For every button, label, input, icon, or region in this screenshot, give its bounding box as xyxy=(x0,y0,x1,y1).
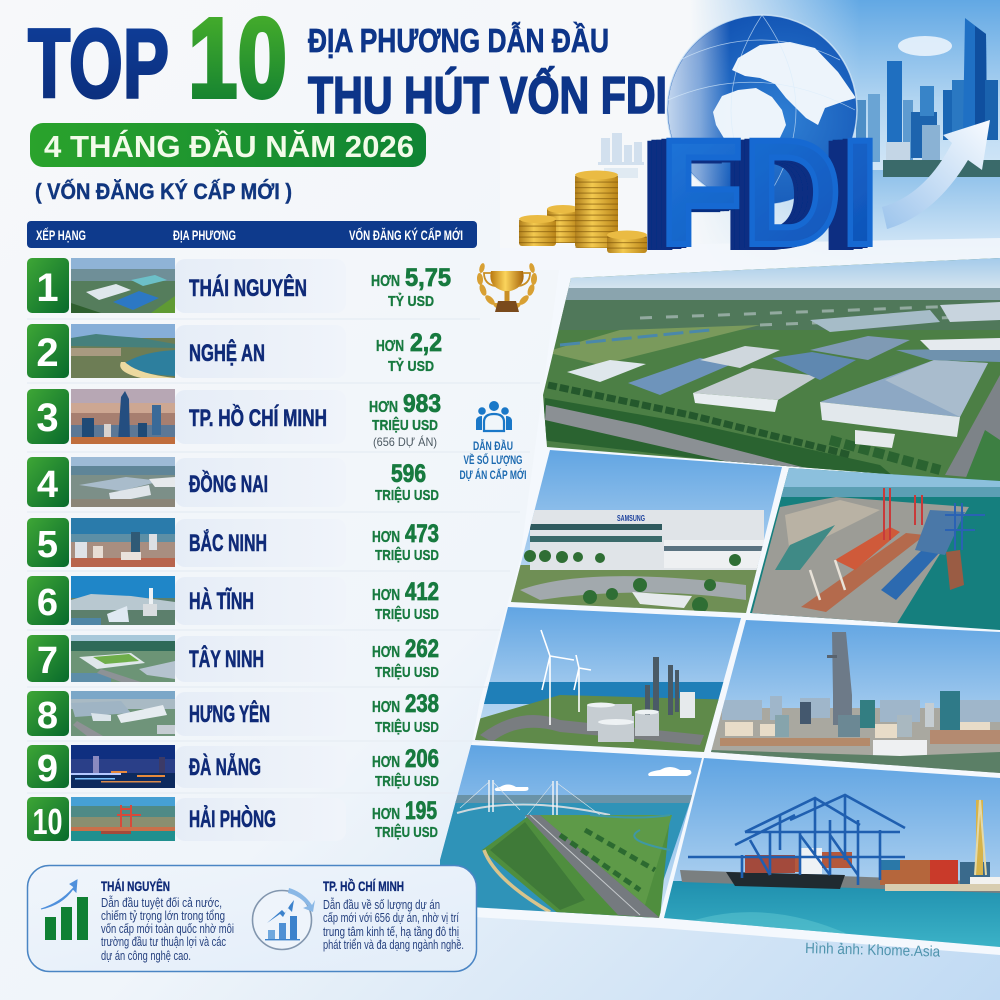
row 1: Thái Nguyên xyxy=(27,258,451,313)
row 3: TP. Hồ Chí Minh: 3 xyxy=(36,396,59,440)
row 7: Tây Ninh: 262 xyxy=(405,635,439,663)
label: Samsung sign: SAMSUNG xyxy=(617,513,645,523)
row 2: Nghệ An: 2 xyxy=(36,331,59,375)
photo: Ho Chi Minh City skyline xyxy=(705,615,1000,780)
title: TOP 10: TOP xyxy=(28,9,169,118)
row 5: Bắc Ninh: TRIỆU USD xyxy=(375,546,439,564)
heading: subtitle: ĐỊA PHƯƠNG DẪN ĐẦU xyxy=(308,22,609,59)
row 1: Thái Nguyên: TỶ USD xyxy=(388,293,434,310)
text: Thái Nguyên: Dẫn đầu tuyệt đối cả nước, xyxy=(101,895,222,910)
photo: bridge and highway xyxy=(440,743,705,920)
icon: people group xyxy=(476,401,512,431)
callout: most new projects: VỀ SỐ LƯỢNG xyxy=(464,452,522,467)
row 3: TP. Hồ Chí Minh: (656 DỰ ÁN) xyxy=(373,434,437,449)
row 10: Hải Phòng: HƠN xyxy=(372,806,400,823)
credit: Hình ảnh: Khome.Asia xyxy=(805,940,941,961)
row 3: TP. Hồ Chí Minh: TP. HỒ CHÍ MINH xyxy=(189,404,327,432)
icon: bar chart with arrow xyxy=(41,880,88,940)
row 8: Hưng Yên: HƠN xyxy=(372,699,400,716)
text: TP. Hồ Chí Minh: phát triển và đa dạng ngành nghề. xyxy=(323,938,464,952)
photo: container port xyxy=(745,465,1000,635)
icon: chart in circle xyxy=(252,888,315,950)
row 10: Hải Phòng: HẢI PHÒNG xyxy=(189,804,276,833)
text: Thái Nguyên: THÁI NGUYÊN xyxy=(101,877,170,894)
panel: white frame behind photos xyxy=(440,250,1000,955)
3D FDI letters: FDI xyxy=(660,108,879,276)
row 6: Hà Tĩnh xyxy=(27,576,439,625)
row 2: Nghệ An: TỶ USD xyxy=(388,358,434,375)
text: Thái Nguyên xyxy=(101,877,234,963)
row 4: Đồng Nai: ĐỒNG NAI xyxy=(189,470,268,498)
row 3: TP. Hồ Chí Minh: HƠN xyxy=(369,399,398,416)
row 2: Nghệ An xyxy=(27,324,442,378)
row 10: Hải Phòng xyxy=(27,797,438,842)
row 8: Hưng Yên: HƯNG YÊN xyxy=(189,700,270,728)
gold coin stacks xyxy=(519,170,647,253)
row 7: Tây Ninh: 7 xyxy=(37,640,58,682)
row 6: Hà Tĩnh: 6 xyxy=(37,582,58,624)
row 6: Hà Tĩnh: TRIỆU USD xyxy=(375,605,439,623)
text: TP. Hồ Chí Minh: trung tâm kinh tế, hạ tầng đô thị xyxy=(323,925,459,939)
arrow: upward growth xyxy=(882,120,990,229)
hero illustration: FDI globe and skyline xyxy=(519,0,1000,253)
row 3: TP. Hồ Chí Minh: TRIỆU USD xyxy=(372,416,438,434)
callout: most new projects: DẪN ĐẦU xyxy=(473,438,513,453)
bottom card: highlights xyxy=(28,866,476,972)
row 6: Hà Tĩnh: 412 xyxy=(405,578,439,606)
row 9: Đà Nẵng: ĐÀ NẴNG xyxy=(189,753,261,781)
row 7: Tây Ninh: HƠN xyxy=(372,644,400,661)
period badge: 4 THÁNG ĐẦU NĂM 2026 xyxy=(44,129,414,164)
row 4: Đồng Nai: 4 xyxy=(37,464,58,506)
row 7: Tây Ninh: TRIỆU USD xyxy=(375,663,439,681)
row 6: Hà Tĩnh: HÀ TĨNH xyxy=(189,587,254,615)
callout: most new projects xyxy=(460,401,526,482)
table header: ĐỊA PHƯƠNG xyxy=(173,227,236,243)
row 7: Tây Ninh: TÂY NINH xyxy=(189,645,264,673)
icon: trophy with laurel xyxy=(476,263,538,312)
skyline xyxy=(856,18,1000,177)
table header: VỐN ĐĂNG KÝ CẤP MỚI xyxy=(349,226,463,243)
text: Thái Nguyên: trường đầu tư thuận lợi và các xyxy=(101,935,226,949)
row 4: Đồng Nai: 596 xyxy=(391,460,426,488)
row 5: Bắc Ninh: 5 xyxy=(37,524,58,566)
row 4: Đồng Nai: TRIỆU USD xyxy=(375,486,439,504)
row 5: Bắc Ninh xyxy=(27,518,439,567)
row 8: Hưng Yên: TRIỆU USD xyxy=(375,718,439,736)
row 10: Hải Phòng: 195 xyxy=(405,797,437,825)
row 1: Thái Nguyên: 1 xyxy=(36,266,59,310)
text: Thái Nguyên: vốn cấp mới toàn quốc nhờ môi xyxy=(101,922,234,936)
row 3: TP. Hồ Chí Minh: 983 xyxy=(403,390,441,418)
row 10: Hải Phòng: 10 xyxy=(32,801,62,842)
table header xyxy=(27,221,477,248)
row 9: Đà Nẵng: 206 xyxy=(405,745,439,773)
row 2: Nghệ An: HƠN xyxy=(376,338,404,355)
globe xyxy=(660,10,860,210)
text: Thái Nguyên: dự án công nghệ cao. xyxy=(101,949,191,963)
title: TOP 10 xyxy=(28,0,287,121)
row 1: Thái Nguyên: 5,75 xyxy=(405,264,451,292)
row 1: Thái Nguyên: THÁI NGUYÊN xyxy=(189,274,307,302)
row 8: Hưng Yên: 8 xyxy=(37,695,58,737)
row 1: Thái Nguyên: HƠN xyxy=(371,273,400,290)
text: TP. Hồ Chí Minh: Dẫn đầu về số lượng dự án xyxy=(323,897,440,912)
row 9: Đà Nẵng: HƠN xyxy=(372,754,400,771)
row 5: Bắc Ninh: 473 xyxy=(405,520,439,548)
row 9: Đà Nẵng: 9 xyxy=(37,748,58,790)
row 5: Bắc Ninh: HƠN xyxy=(372,529,400,546)
sky xyxy=(700,0,1000,170)
table header: XẾP HẠNG xyxy=(36,227,86,243)
text: TP. Hồ Chí Minh: TP. HỒ CHÍ MINH xyxy=(323,877,404,894)
row 2: Nghệ An: 2,2 xyxy=(410,329,442,357)
text: TP. Hồ Chí Minh: cấp mới với 656 dự án, nhờ vị trí xyxy=(323,911,459,925)
note: registered capital: ( VỐN ĐĂNG KÝ CẤP MỚI ) xyxy=(35,178,292,204)
row 8: Hưng Yên: 238 xyxy=(405,690,439,718)
row 4: Đồng Nai xyxy=(27,457,439,507)
row 2: Nghệ An: NGHỆ AN xyxy=(189,339,265,367)
heading: subtitle xyxy=(308,22,667,125)
row 9: Đà Nẵng: TRIỆU USD xyxy=(375,772,439,790)
row 3: TP. Hồ Chí Minh xyxy=(27,389,441,449)
photo: industrial park xyxy=(540,255,1000,485)
row 9: Đà Nẵng xyxy=(27,745,439,790)
text: TP. Hồ Chí Minh xyxy=(323,877,464,952)
row 8: Hưng Yên xyxy=(27,690,439,737)
photo: port cranes xyxy=(660,755,1000,951)
photo: energy plant xyxy=(470,603,745,755)
heading: subtitle: THU HÚT VỐN FDI xyxy=(308,66,667,125)
photo: Samsung factory xyxy=(505,445,790,615)
water xyxy=(713,170,1000,242)
callout: most new projects: DỰ ÁN CẤP MỚI xyxy=(460,467,526,482)
text: Thái Nguyên: chiếm tỷ trọng lớn trong tổng xyxy=(101,909,225,923)
distant city xyxy=(598,133,644,178)
row 5: Bắc Ninh: BẮC NINH xyxy=(189,529,267,557)
row 10: Hải Phòng: TRIỆU USD xyxy=(375,823,438,841)
row 6: Hà Tĩnh: HƠN xyxy=(372,587,400,604)
row 7: Tây Ninh xyxy=(27,635,439,682)
